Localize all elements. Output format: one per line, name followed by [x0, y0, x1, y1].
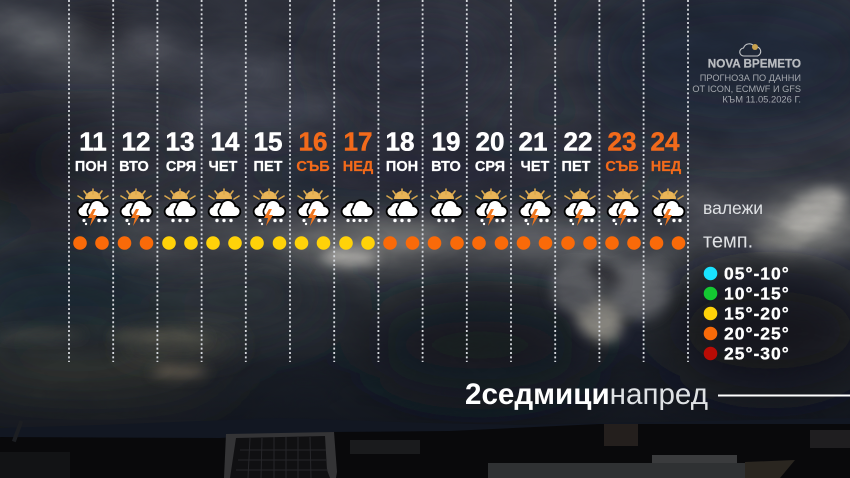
date headers: 22: [564, 126, 592, 156]
weather icons row: [78, 189, 684, 226]
heading: 2 weeks ahead: 2седмицинапред: [465, 378, 708, 411]
date headers: 20: [476, 126, 504, 156]
temperature dots row: [73, 236, 685, 250]
row labels: [703, 198, 763, 252]
date headers: ВТО: [119, 159, 149, 175]
date headers: НЕД: [343, 159, 374, 175]
date headers: ПЕТ: [562, 159, 591, 175]
date headers: 13: [166, 126, 194, 156]
date headers: 14: [211, 126, 240, 156]
date headers: СЪБ: [605, 159, 639, 175]
logo wordmark: NOVA ВРЕМЕТО: [708, 58, 801, 70]
date headers: ЧЕТ: [521, 159, 550, 175]
temperature legend: 15°-20°: [724, 304, 790, 324]
date headers: СРЯ: [475, 159, 505, 175]
date headers: 23: [608, 126, 636, 156]
date headers: [75, 126, 682, 175]
mountain and ground: [0, 418, 850, 478]
temperature legend: 10°-15°: [724, 284, 790, 304]
row labels: валежи: [703, 198, 763, 218]
icon: logo cloud: [740, 44, 761, 56]
dashed column dividers: [69, 0, 688, 362]
date headers: ВТО: [431, 159, 461, 175]
date headers: ПОН: [75, 159, 107, 175]
date headers: СЪБ: [296, 159, 330, 175]
date headers: ПЕТ: [254, 159, 283, 175]
source note: КЪМ 11.05.2026 Г.: [722, 94, 801, 104]
date headers: 12: [122, 126, 150, 156]
source note: ОТ ICON, ECMWF И GFS: [692, 84, 801, 94]
date headers: СРЯ: [166, 159, 196, 175]
branding: Nova Времето: [692, 44, 801, 104]
date headers: ПОН: [386, 159, 418, 175]
date headers: 21: [519, 126, 547, 156]
temperature legend: 20°-25°: [724, 324, 790, 344]
temperature legend: [704, 264, 790, 364]
date headers: 24: [651, 126, 680, 156]
row labels: темп.: [703, 230, 753, 252]
date headers: ЧЕТ: [209, 159, 238, 175]
temperature legend: 05°-10°: [724, 264, 790, 284]
date headers: 17: [344, 126, 372, 156]
date headers: 11: [79, 126, 107, 156]
date headers: НЕД: [651, 159, 682, 175]
source note: ПРОГНОЗА ПО ДАННИ: [700, 73, 801, 83]
temperature legend: 25°-30°: [724, 344, 790, 364]
date headers: 18: [386, 126, 414, 156]
date headers: 16: [299, 126, 327, 156]
source note: [692, 73, 801, 104]
date headers: 15: [254, 126, 282, 156]
date headers: 19: [432, 126, 460, 156]
